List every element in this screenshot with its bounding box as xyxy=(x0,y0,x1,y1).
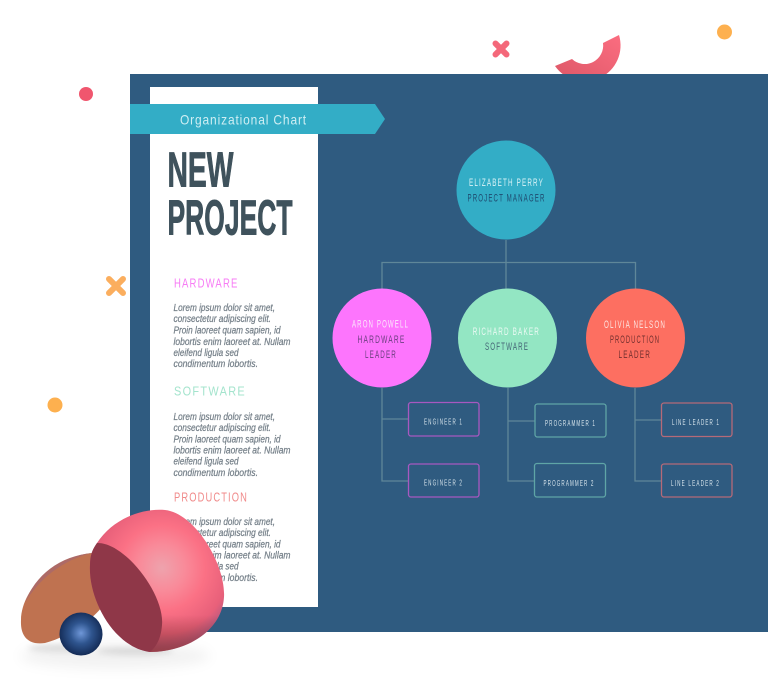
section: production: lobortis enim laoreet at. Nullam xyxy=(174,550,290,562)
node: Olivia Nelson: LEADER xyxy=(618,349,651,361)
section: hardware: eleifend ligula sed xyxy=(174,348,239,359)
node: Richard Baker: SOFTWARE xyxy=(485,341,529,353)
decoration: orange cross xyxy=(109,279,123,293)
box: Programmer 2 xyxy=(534,464,606,497)
section: production: condimentum lobortis. xyxy=(174,573,258,584)
node: Richard Baker xyxy=(458,288,557,388)
decoration: red dot xyxy=(79,87,93,101)
blue sphere xyxy=(60,612,102,656)
box: Engineer 2: ENGINEER 2 xyxy=(424,478,463,488)
box: Line Leader 2: LINE LEADER 2 xyxy=(671,479,720,488)
section: hardware: lobortis enim laoreet at. Nullam xyxy=(174,337,290,348)
box: Programmer 2: PROGRAMMER 2 xyxy=(544,479,594,488)
section: production: Lorem ipsum dolor sit amet, xyxy=(174,517,275,528)
decoration: half ring xyxy=(555,35,621,81)
box: Line Leader 1 xyxy=(662,403,732,436)
section: software: lobortis enim laoreet at. Nullam xyxy=(174,446,290,456)
decoration: pink cross xyxy=(496,44,506,54)
section: hardware: Lorem ipsum dolor sit amet, xyxy=(174,303,275,314)
section: software: SOFTWARE xyxy=(174,384,246,398)
section: hardware: HARDWARE xyxy=(174,276,238,290)
section: hardware: Proin laoreet quam sapien, id xyxy=(174,326,281,336)
box: Engineer 2 xyxy=(408,464,479,497)
node: Aron Powell xyxy=(332,288,432,388)
section: production: consectetur adipiscing elit. xyxy=(174,528,271,539)
ribbon banner: Organizational Chart xyxy=(180,112,307,128)
org chart connectors xyxy=(382,240,661,481)
node: Aron Powell: ARON POWELL xyxy=(352,318,409,330)
node: Elizabeth Perry: ELIZABETH PERRY xyxy=(469,177,544,189)
ribbon banner xyxy=(130,104,385,134)
pink half sphere xyxy=(90,510,224,652)
node: Aron Powell: HARDWARE xyxy=(358,334,406,346)
node: Aron Powell: LEADER xyxy=(365,349,397,361)
section: software: Proin laoreet quam sapien, id xyxy=(174,434,281,446)
section: software: consectetur adipiscing elit. xyxy=(174,423,271,434)
section: software: Lorem ipsum dolor sit amet, xyxy=(174,412,275,423)
section: software: condimentum lobortis. xyxy=(174,468,258,479)
node: Richard Baker: RICHARD BAKER xyxy=(473,326,540,338)
section: software: eleifend ligula sed xyxy=(174,456,239,468)
decoration: amber dot top right xyxy=(717,24,732,40)
node: Olivia Nelson: PRODUCTION xyxy=(610,334,660,346)
main navy panel xyxy=(130,74,768,632)
section: production: eleifend ligula sed xyxy=(174,562,239,572)
node: Olivia Nelson: OLIVIA NELSON xyxy=(604,319,666,331)
section: production: Proin laoreet quam sapien, id xyxy=(174,540,281,550)
box: Engineer 1 xyxy=(408,402,479,436)
section: hardware xyxy=(174,276,290,370)
decoration: amber dot left xyxy=(48,398,62,412)
title: NEW xyxy=(168,144,234,198)
white side panel xyxy=(150,87,318,607)
title xyxy=(168,144,293,246)
node: Elizabeth Perry: PROJECT MANAGER xyxy=(468,192,546,204)
node: Olivia Nelson xyxy=(586,288,685,388)
section: hardware: condimentum lobortis. xyxy=(174,359,258,370)
box: Line Leader 1: LINE LEADER 1 xyxy=(672,418,720,427)
3D shapes illustration xyxy=(20,510,224,669)
box: Line Leader 2 xyxy=(662,464,732,497)
box: Engineer 1: ENGINEER 1 xyxy=(424,418,463,426)
section: hardware: consectetur adipiscing elit. xyxy=(174,314,271,325)
box: Programmer 1: PROGRAMMER 1 xyxy=(545,419,596,428)
section: software xyxy=(174,384,290,479)
box: Programmer 1 xyxy=(535,404,606,437)
section: production: PRODUCTION xyxy=(174,490,248,504)
node: Elizabeth Perry xyxy=(456,140,556,240)
orange half disc xyxy=(21,553,102,643)
title: PROJECT xyxy=(168,192,293,246)
section: production xyxy=(174,490,290,584)
